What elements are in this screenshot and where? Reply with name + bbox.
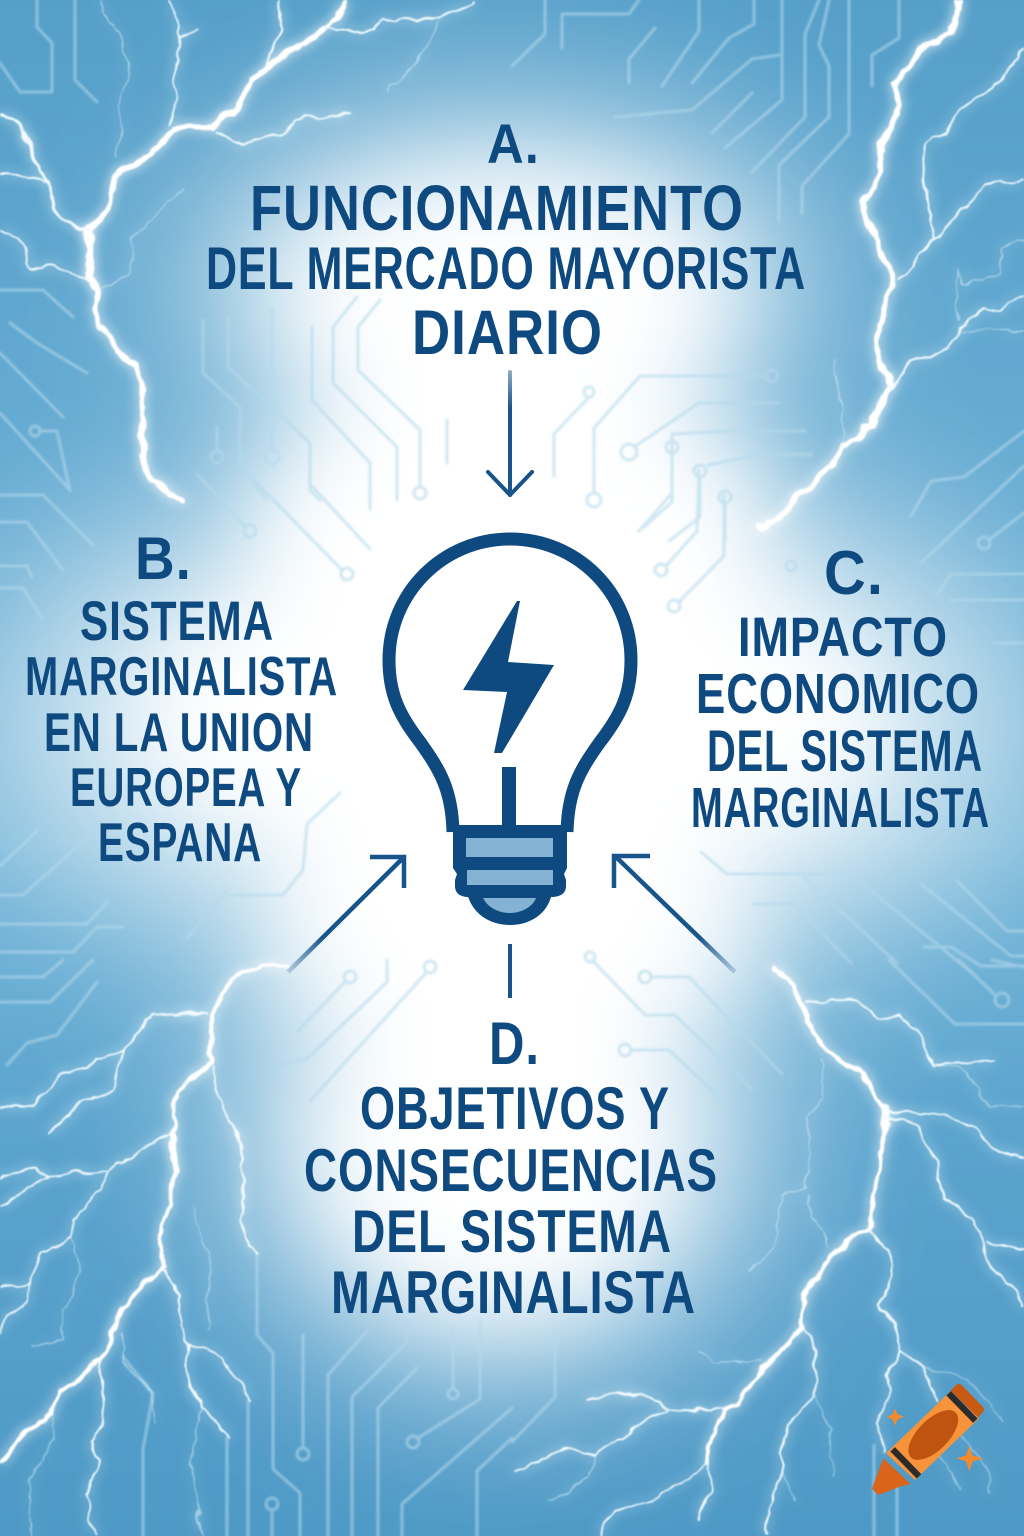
heading B: B. (135, 525, 192, 592)
heading C: C. (824, 539, 884, 608)
heading D: DEL SISTEMA (352, 1198, 672, 1265)
heading D (304, 1010, 718, 1326)
heading D: OBJETIVOS Y (360, 1075, 670, 1142)
heading A: A. (487, 112, 540, 175)
heading B: EN LA UNION (44, 701, 314, 763)
crayon label (900, 1402, 967, 1468)
bulb glass outline (389, 539, 631, 832)
heading A: FUNCIONAMIENTO (250, 172, 744, 244)
arrow: D connector line (508, 944, 512, 998)
heading D: CONSECUENCIAS (304, 1137, 718, 1204)
arrow: C to bulb (614, 856, 735, 972)
heading A: DIARIO (412, 298, 603, 368)
lightning: bottom-left bolt (0, 964, 287, 1536)
heading B: ESPANA (98, 811, 262, 873)
lightning bolt (463, 601, 554, 753)
arrow: B to bulb (288, 857, 404, 972)
heading A: DEL MERCADO MAYORISTA (206, 235, 806, 302)
heading C (691, 539, 990, 840)
heading A (206, 112, 806, 368)
icon: crayon logo (872, 1384, 984, 1495)
sparkles (887, 1408, 904, 1426)
icon: light bulb (389, 539, 631, 925)
lightning: top-left bolt (0, 0, 473, 500)
screw base (453, 825, 567, 897)
heading D: MARGINALISTA (331, 1259, 696, 1326)
crayon bands (893, 1393, 975, 1476)
crayon cap (951, 1384, 984, 1417)
lightning: top-right bolt (759, 0, 1024, 531)
heading B: EUROPEA Y (70, 756, 302, 818)
heading B: SISTEMA (80, 589, 274, 652)
filament (502, 767, 516, 827)
base highlights (466, 838, 553, 913)
heading B: MARGINALISTA (25, 645, 338, 707)
base cap (467, 893, 552, 925)
heading C: IMPACTO (738, 605, 948, 668)
lightning: bottom-right bolt (512, 971, 1024, 1536)
arrow: A to bulb (488, 372, 532, 495)
crayon tip (872, 1458, 911, 1495)
crayon body (886, 1392, 979, 1480)
heading B (25, 525, 338, 873)
heading D: D. (489, 1010, 540, 1077)
